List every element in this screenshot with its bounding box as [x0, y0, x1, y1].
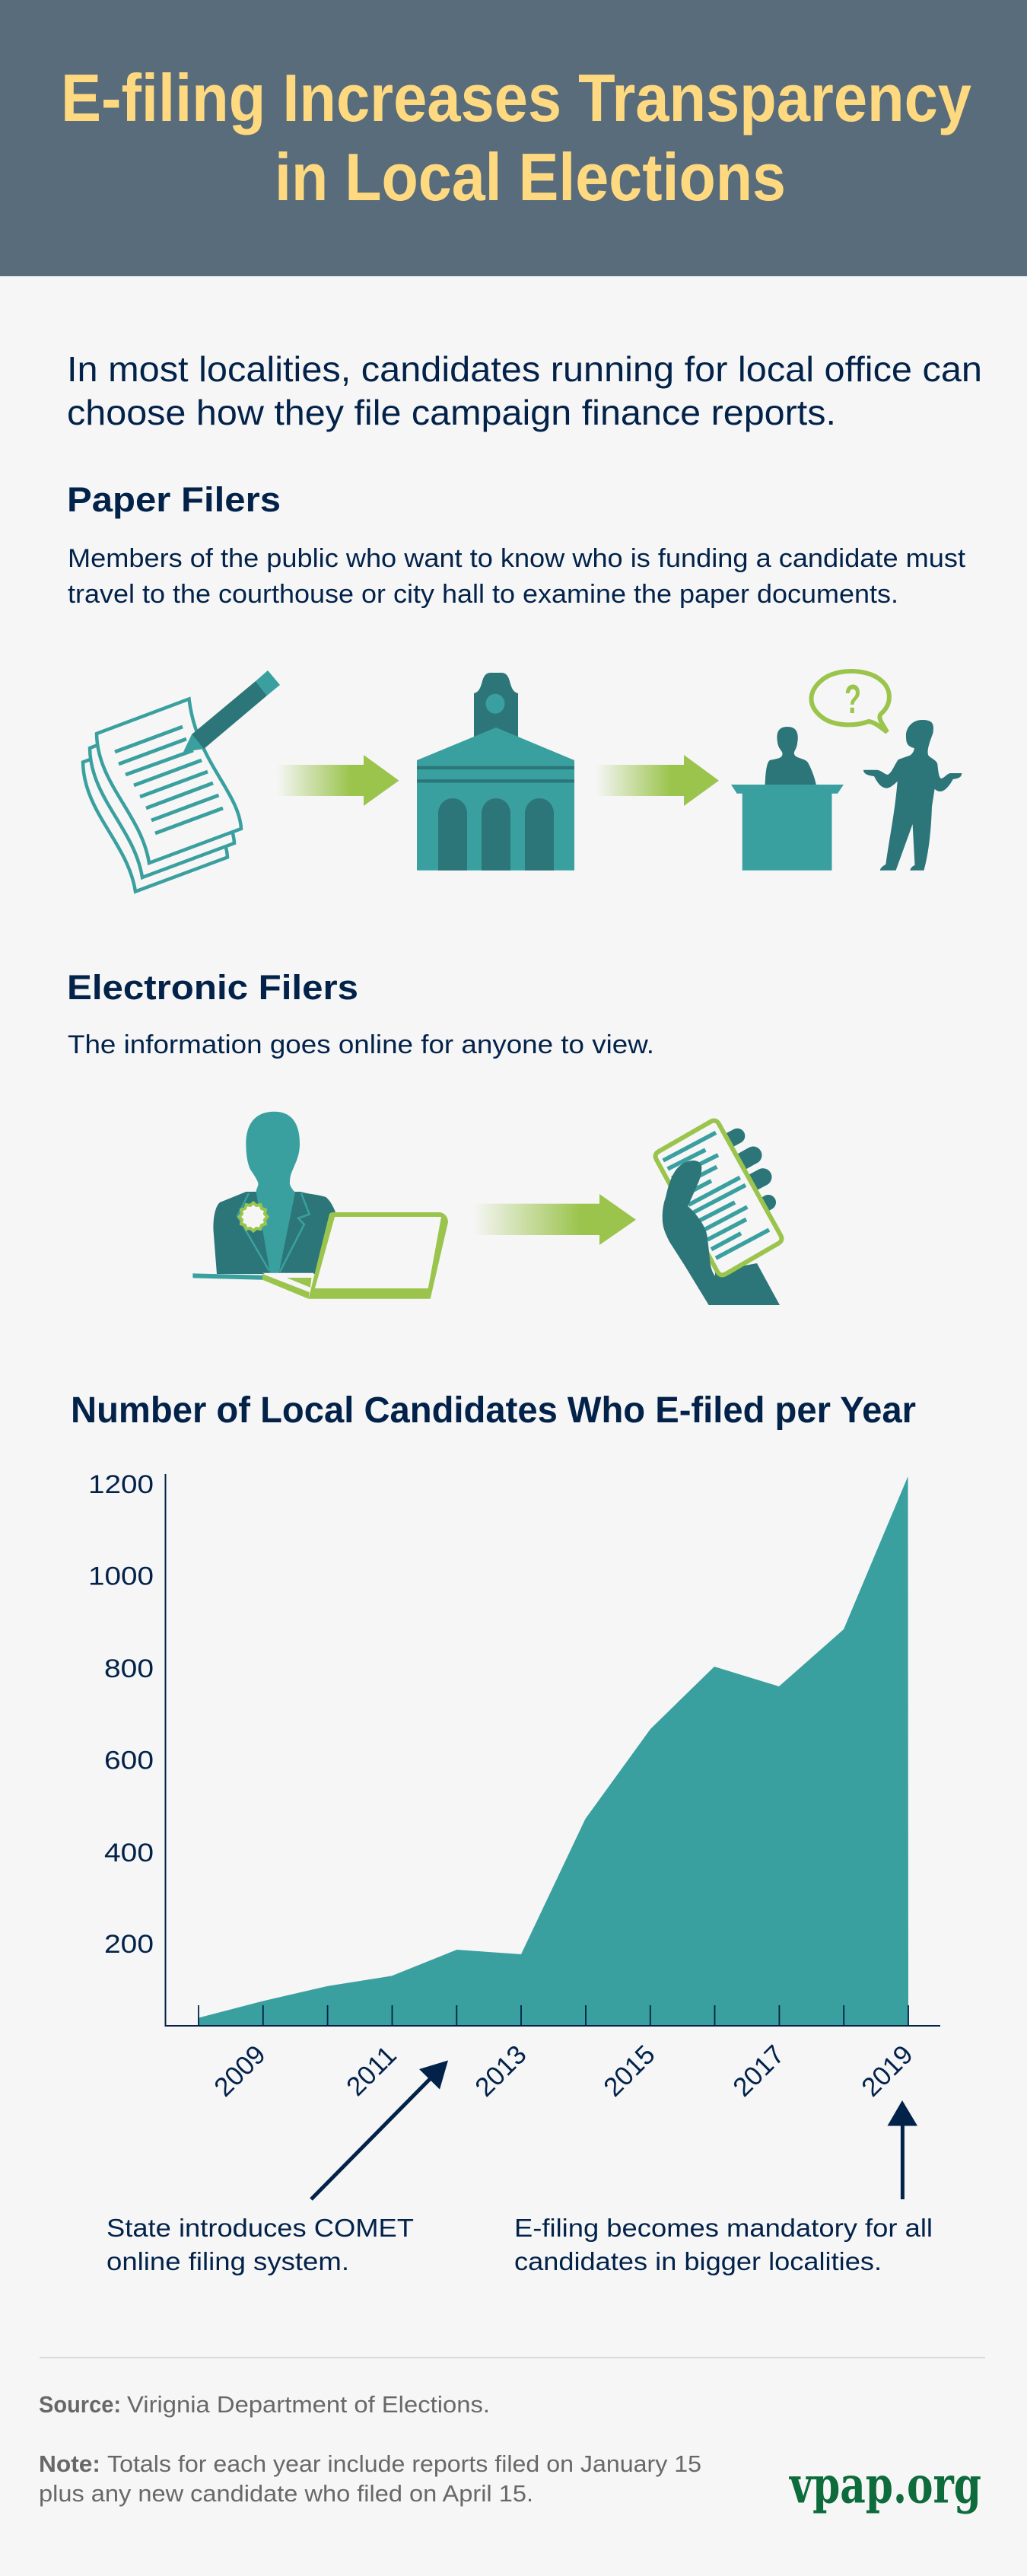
annotation: mandatory e-filing: candidates in bigger localities.: [514, 2247, 882, 2275]
x axis labels: 2015: [598, 2039, 661, 2103]
arrow: paper to courthouse: [277, 755, 399, 806]
title: in Local Elections: [275, 139, 786, 215]
y axis labels: 1200: [88, 1470, 154, 1499]
phone: [656, 1121, 781, 1275]
y axis labels: [88, 1470, 154, 1959]
icon: hand holding phone: [656, 1121, 781, 1305]
arrow: courthouse to public: [596, 755, 719, 806]
icon: paper documents and pencil: [83, 670, 280, 892]
x axis labels: 2019: [856, 2039, 919, 2103]
thumb and palm: [663, 1161, 720, 1305]
intro text: [67, 349, 982, 432]
y axis labels: 1000: [88, 1562, 154, 1591]
methodology note: Totals for each year include reports filed on January 15: [107, 2450, 701, 2477]
source note: Source:: [39, 2391, 121, 2418]
electronic filers description: The information goes online for anyone to view.: [68, 1030, 654, 1059]
laptop: [262, 1212, 448, 1299]
x axis labels: 2013: [469, 2039, 533, 2103]
y axis labels: 600: [104, 1746, 154, 1775]
axes: [165, 1474, 940, 2027]
campaign badge: [239, 1202, 268, 1231]
intro text: choose how they file campaign finance reports.: [67, 393, 836, 432]
paper filers description: travel to the courthouse or city hall to examine the paper documents.: [68, 580, 898, 609]
intro text: In most localities, candidates running for local office can: [67, 349, 982, 389]
y axis labels: 400: [104, 1839, 154, 1868]
heading: paper filers: Paper Filers: [67, 480, 281, 519]
icon: confused person: [863, 720, 962, 871]
methodology note: [39, 2450, 701, 2507]
methodology note: plus any new candidate who filed on April 15.: [39, 2480, 533, 2507]
icon: candidate at laptop: [192, 1112, 448, 1299]
icon: speech bubble with question mark: ?: [844, 677, 861, 722]
y axis labels: 200: [104, 1930, 154, 1959]
annotation: COMET: online filing system.: [107, 2247, 349, 2275]
x axis labels: 2017: [727, 2039, 790, 2103]
methodology note: Note:: [39, 2450, 100, 2477]
icon: courthouse: [417, 673, 574, 871]
x axis labels: 2011: [341, 2040, 402, 2102]
arrow: COMET annotation: [311, 2061, 448, 2199]
arrow: mandatory annotation: [887, 2100, 917, 2199]
y axis labels: 800: [104, 1654, 154, 1683]
annotation: COMET: [107, 2214, 414, 2275]
logo: vpap.org: vpap.org: [788, 2455, 981, 2514]
annotation: mandatory e-filing: [514, 2214, 933, 2275]
paper filers description: [68, 544, 965, 609]
arrow: filer to online: [473, 1194, 636, 1245]
chart title: Number of Local Candidates Who E-filed per Year: [71, 1390, 916, 1431]
x axis labels: 2009: [208, 2039, 272, 2103]
annotation: COMET: State introduces COMET: [107, 2214, 414, 2242]
paper filers description: Members of the public who want to know who is funding a candidate must: [68, 544, 965, 573]
icon: speech bubble with question mark: [811, 671, 889, 732]
title banner: [0, 0, 1027, 276]
title: [61, 60, 971, 215]
icon: clerk behind podium: [731, 727, 844, 871]
source note: Virignia Department of Elections.: [127, 2391, 490, 2418]
heading: electronic filers: Electronic Filers: [67, 968, 358, 1007]
desk: [192, 1273, 262, 1280]
x axis labels: [208, 2039, 919, 2103]
annotation: mandatory e-filing: E-filing becomes mandatory for all: [514, 2214, 933, 2242]
area chart: [88, 1470, 940, 2103]
area: e-filers per year: [199, 1476, 908, 2026]
